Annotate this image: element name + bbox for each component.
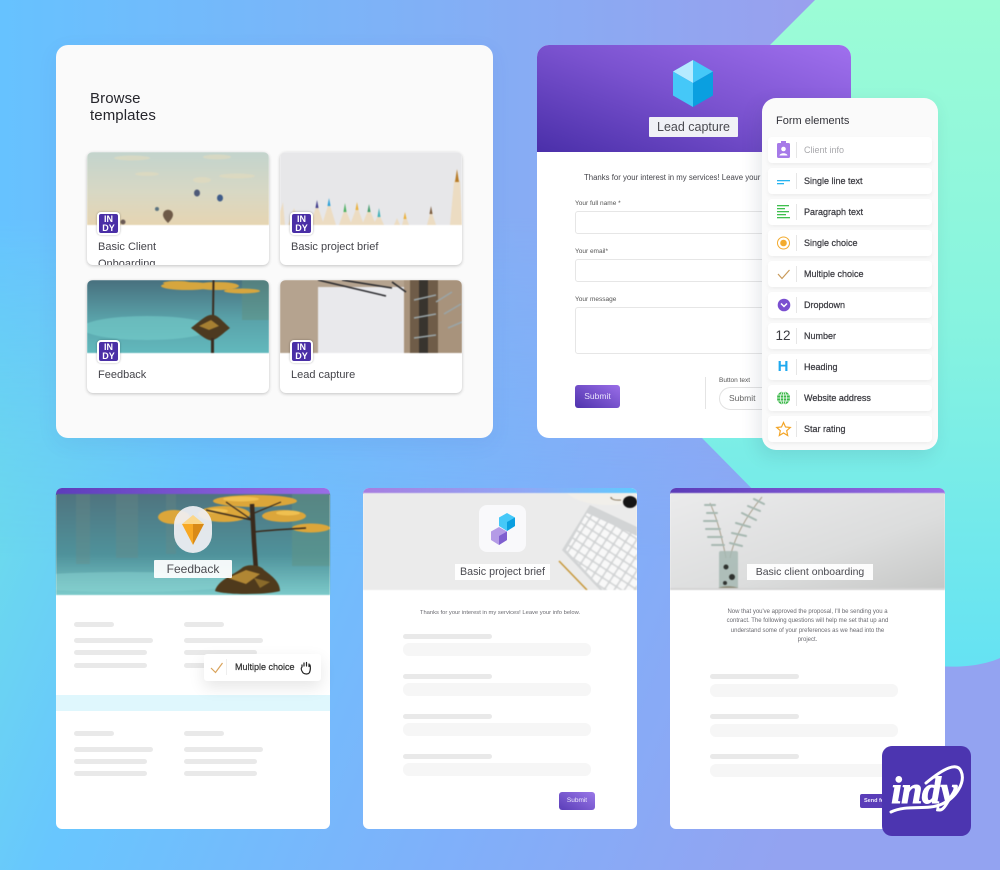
template card: basic client onboarding xyxy=(87,152,269,265)
title tag: Basic client onboarding xyxy=(756,566,864,578)
photo: keyboard desk xyxy=(363,492,637,591)
element: number: Number xyxy=(804,331,836,341)
icon: gem badge xyxy=(174,506,212,553)
badge: indy: DY xyxy=(102,350,115,360)
template card: lead capture xyxy=(280,280,462,393)
badge: indy: DY xyxy=(295,350,308,360)
heading: browse templates: templates xyxy=(90,106,156,124)
input: message xyxy=(575,307,837,354)
photo: paper and pens xyxy=(280,280,462,354)
element: multiple choice: Multiple choice xyxy=(804,269,864,279)
submit button: Submit xyxy=(584,391,611,401)
icon: check xyxy=(210,662,223,674)
photo: pencils xyxy=(280,152,462,226)
template card: basic project brief xyxy=(280,152,462,265)
badge: indy xyxy=(97,340,120,363)
submit button xyxy=(575,385,620,408)
title tag xyxy=(747,564,873,580)
element: paragraph text xyxy=(768,199,932,225)
title: Lead capture xyxy=(291,369,355,381)
title tag xyxy=(649,117,738,137)
element: heading: H xyxy=(778,358,788,375)
placeholder fields xyxy=(403,634,591,776)
badge: indy xyxy=(97,212,120,235)
intro text: Thanks for your interest in my services! Leave your info below. xyxy=(584,173,799,182)
element: client info xyxy=(768,137,932,163)
title: Basic Client xyxy=(98,241,156,253)
input: full name xyxy=(575,211,837,234)
title tag: Basic project brief xyxy=(460,566,545,578)
top colour strip xyxy=(363,488,637,494)
badge: indy: IN xyxy=(297,342,306,352)
photo: lake tree xyxy=(55,494,331,596)
element: star rating: Star rating xyxy=(804,424,846,434)
top colour strip xyxy=(56,488,330,495)
panel: feedback form xyxy=(56,488,330,829)
intro text: Thanks for your interest in my services! Leave your info below. xyxy=(420,610,580,616)
heading: browse templates: Browse xyxy=(90,90,141,107)
element: website address xyxy=(768,385,932,411)
panel: basic client onboarding form xyxy=(670,488,945,829)
gem xyxy=(182,515,204,545)
element: number: 12 xyxy=(775,328,791,343)
title tag: Feedback xyxy=(167,562,219,576)
button text label: Button text xyxy=(719,377,750,384)
photo: plant in vase xyxy=(670,492,945,590)
intro text: understand some of your preferences as we head into the xyxy=(731,628,884,634)
element: dropdown: Dropdown xyxy=(804,300,845,310)
intro text: contract. The following questions will help me set that up and xyxy=(727,618,888,624)
logo: indy xyxy=(882,746,971,836)
photo: balloons xyxy=(87,152,269,226)
title tag xyxy=(455,564,550,580)
icon: hand cursor xyxy=(300,662,311,675)
title tag: Lead capture xyxy=(657,120,730,134)
top colour strip xyxy=(670,488,945,494)
element: single line text: Single line text xyxy=(804,176,863,186)
chip label: Multiple choice xyxy=(235,662,295,672)
intro text xyxy=(726,608,888,643)
logo wordmark: indy xyxy=(891,770,957,812)
badge: indy xyxy=(290,212,313,235)
panel: lead capture form xyxy=(537,45,851,438)
placeholder fields xyxy=(56,622,330,776)
intro text: Now that you've approved the proposal, I'll be sending you a xyxy=(727,609,888,615)
title: Basic project brief xyxy=(291,241,378,253)
panel: browse templates xyxy=(56,45,493,438)
floating chip: multiple choice xyxy=(204,654,321,681)
button text input: Submit xyxy=(729,393,755,403)
element: number xyxy=(768,323,932,349)
field label: full name: Your full name * xyxy=(575,200,621,207)
element: single line text xyxy=(768,168,932,194)
badge: indy: IN xyxy=(104,214,113,224)
submit button: Submit xyxy=(567,797,587,804)
send button xyxy=(860,794,900,808)
element: dropdown xyxy=(768,292,932,318)
element: client info: Client info xyxy=(804,145,844,155)
element: multiple choice xyxy=(768,261,932,287)
badge: indy xyxy=(290,340,313,363)
element: paragraph text: Paragraph text xyxy=(804,207,863,217)
title tag xyxy=(154,560,232,578)
icon: cubes xyxy=(479,505,526,552)
photo: lake tree xyxy=(87,280,269,354)
placeholder fields xyxy=(710,674,898,777)
element: star rating xyxy=(768,416,932,442)
panel: basic project brief form xyxy=(363,488,637,829)
input: email xyxy=(575,259,837,282)
badge: indy: DY xyxy=(295,222,308,232)
badge: indy: DY xyxy=(102,222,115,232)
button text input xyxy=(719,387,791,410)
heading: form elements: Form elements xyxy=(776,115,849,127)
heading: browse templates xyxy=(90,90,156,124)
title xyxy=(98,241,156,265)
element: heading xyxy=(768,354,932,380)
element: website address: Website address xyxy=(804,393,871,403)
element: single choice xyxy=(768,230,932,256)
badge: indy: IN xyxy=(104,342,113,352)
submit button xyxy=(559,792,595,810)
template card: feedback xyxy=(87,280,269,393)
header band xyxy=(537,45,851,152)
element: heading: Heading xyxy=(804,362,838,372)
title: Feedback xyxy=(98,369,146,381)
field label: message: Your message xyxy=(575,296,616,303)
element: single choice: Single choice xyxy=(804,238,858,248)
badge: indy: IN xyxy=(297,214,306,224)
field label: email: Your email* xyxy=(575,248,608,255)
panel: form elements xyxy=(762,98,938,450)
stacked cubes xyxy=(491,513,515,545)
icon: cube xyxy=(673,60,713,107)
intro text: project. xyxy=(798,637,817,643)
